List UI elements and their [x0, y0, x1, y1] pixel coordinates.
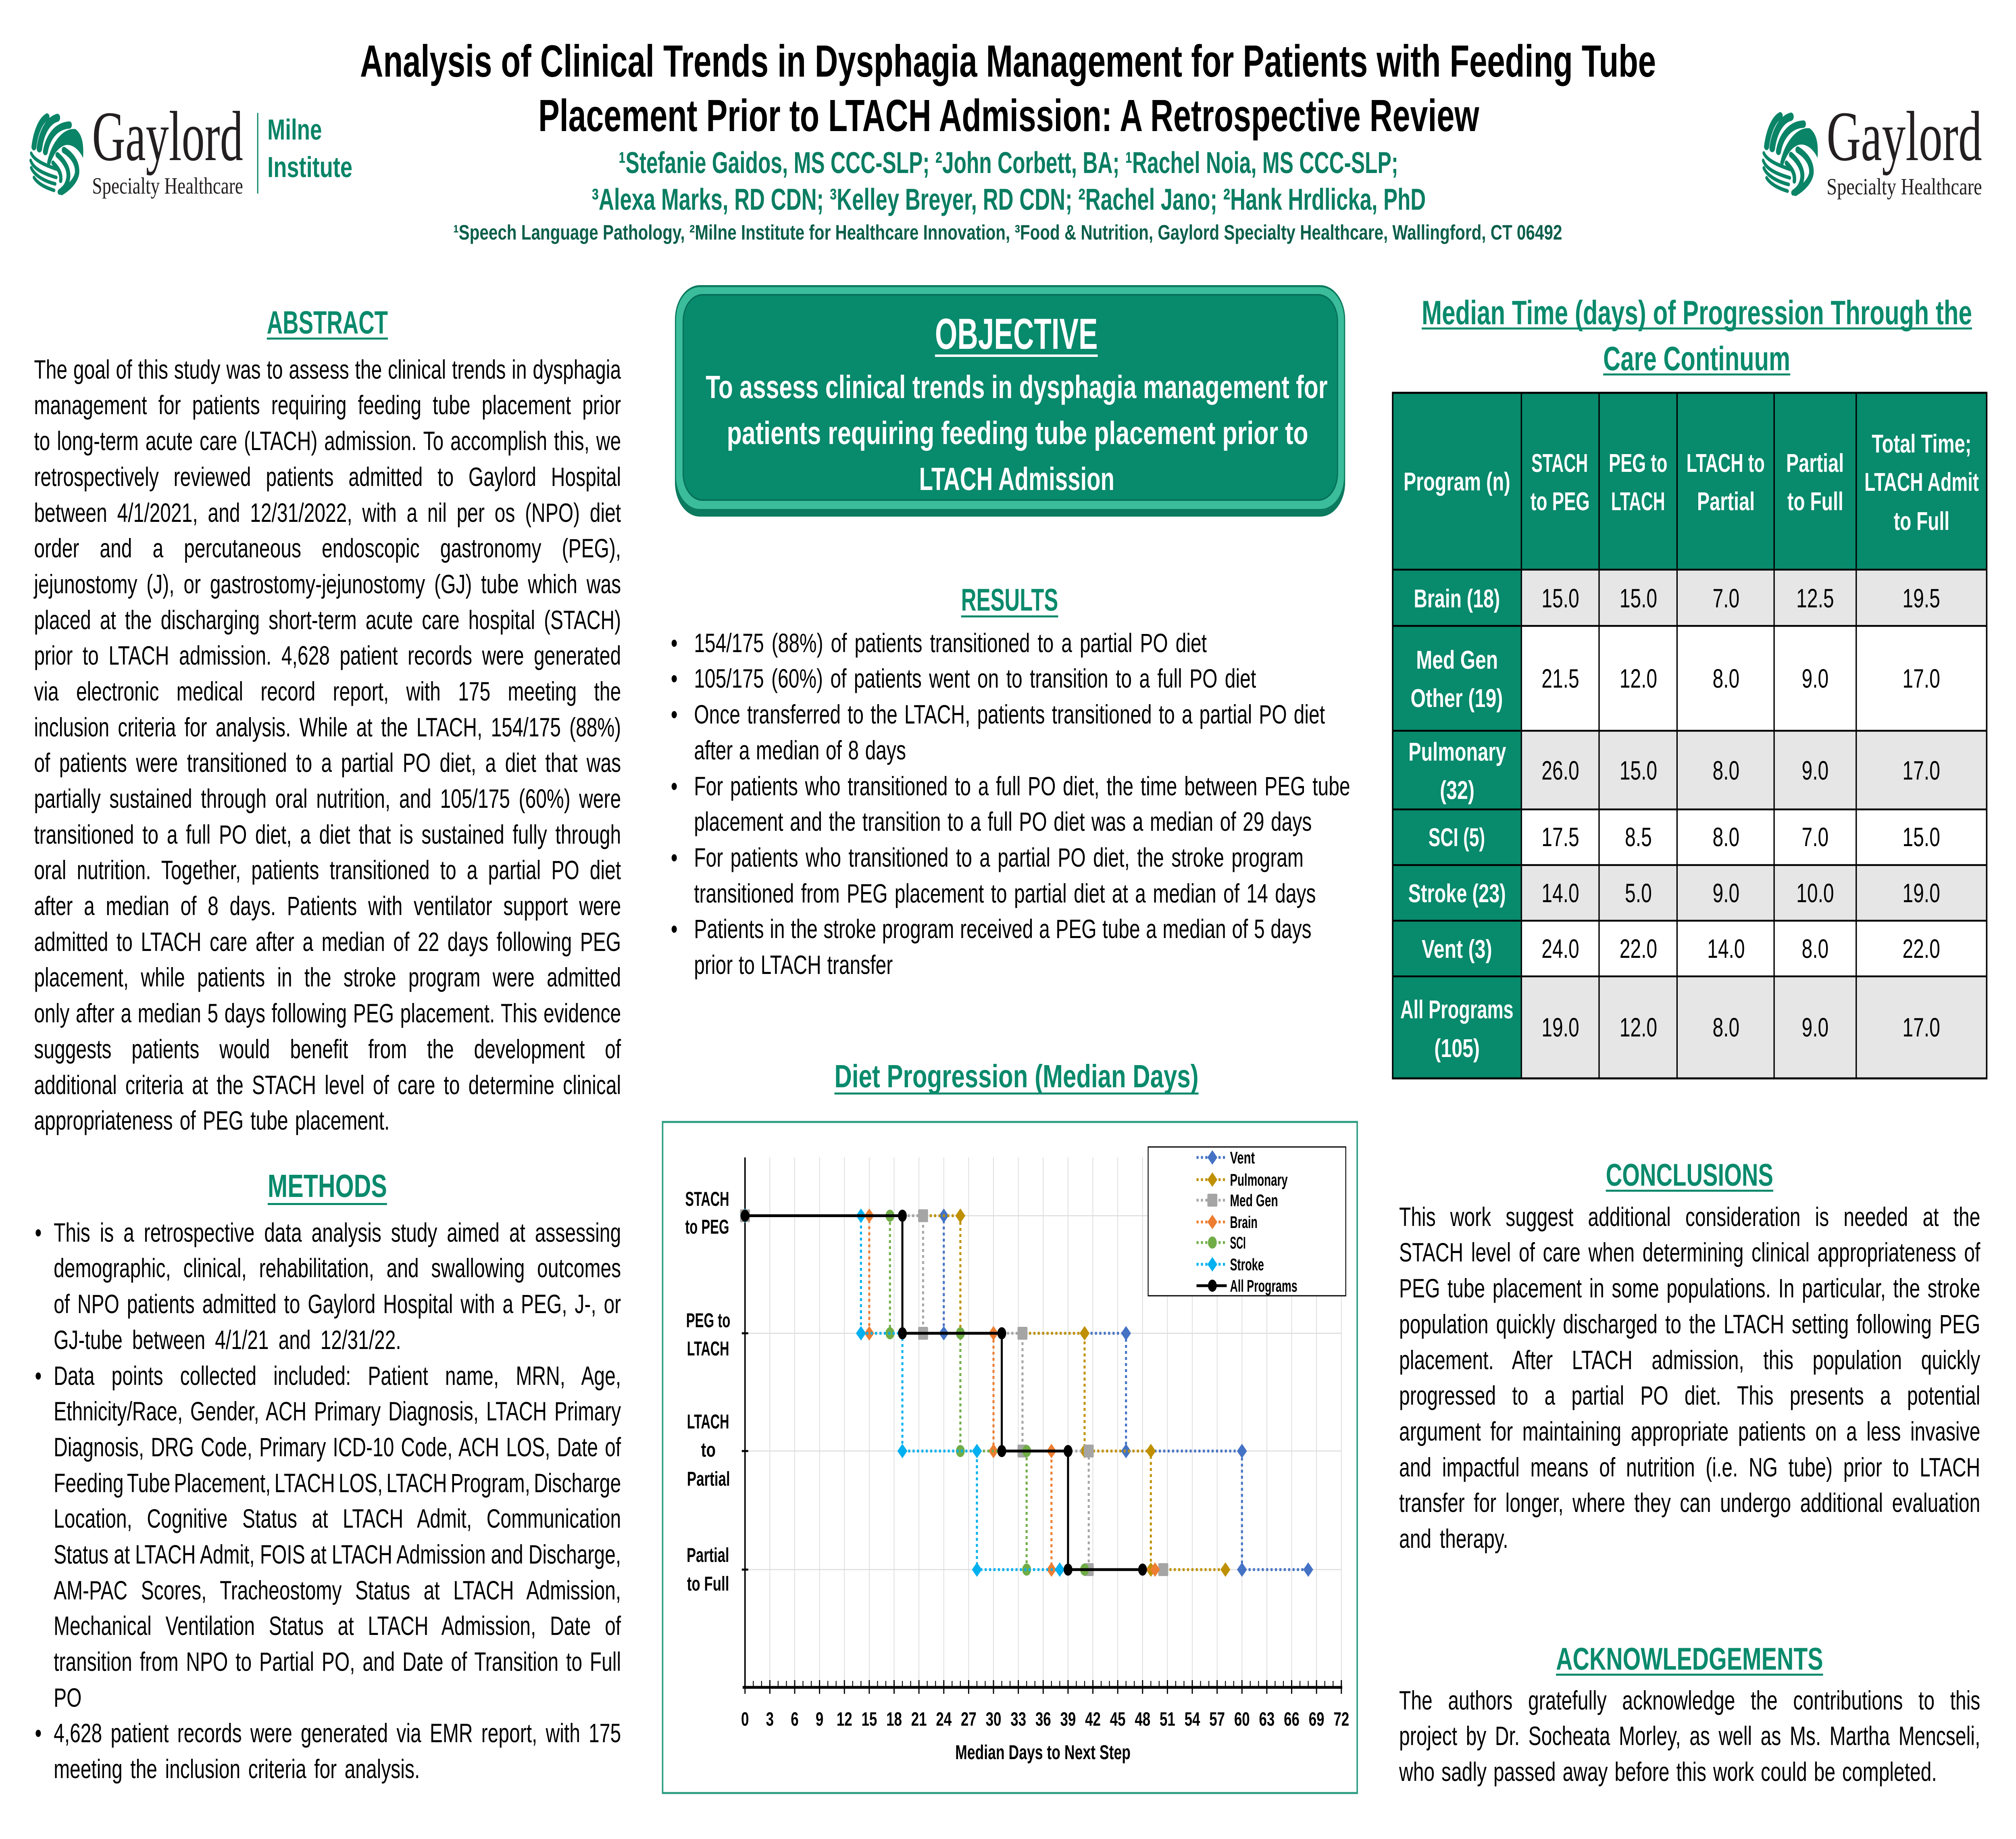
text block: abstract: appropriateness of PEG tube placement. [34, 1105, 389, 1135]
text: • [671, 699, 678, 729]
table header: STACH [1531, 448, 1588, 477]
x axis labels: 54 [1185, 1709, 1200, 1730]
legend: Pulmonary [1230, 1170, 1288, 1189]
table values: 14.0 [1707, 934, 1745, 963]
table values: 8.5 [1625, 822, 1652, 852]
table values: 15.0 [1541, 583, 1579, 613]
affiliations: ¹Speech Language Pathology, ²Milne Institute for Healthcare Innovation, ³Food & Nutrition, Gaylord Specialty Healthcare, Wallingford, CT 06492 [453, 221, 1562, 244]
x axis labels: 72 [1333, 1709, 1349, 1730]
text block: abstract: order and a percutaneous endoscopic gastronomy (PEG), [34, 533, 621, 563]
text: • [671, 663, 678, 693]
text block: results: after a median of 8 days [694, 735, 906, 765]
text block: conclusions: PEG tube placement in some populations. In particular, the stroke [1399, 1273, 1980, 1303]
series: pulmonary [745, 1216, 1225, 1570]
text block: methods: Location, Cognitive Status at LTACH Admit, Communication [54, 1503, 621, 1533]
table values: 7.0 [1802, 822, 1829, 852]
text block: results: 105/175 (60%) of patients went on to transition to a full PO diet [694, 663, 1256, 693]
table values: 22.0 [1902, 934, 1940, 963]
x axis labels: 66 [1284, 1709, 1300, 1730]
authors: ³Alexa Marks, RD CDN; ³Kelley Breyer, RD CDN; ²Rachel Jano; ²Hank Hrdlicka, PhD [591, 182, 1426, 216]
authors [591, 146, 1426, 216]
legend: Stroke [1230, 1255, 1264, 1274]
table header: Partial [1786, 448, 1844, 477]
table values: 17.0 [1902, 755, 1940, 785]
text: • [671, 771, 678, 801]
text block: conclusions: STACH level of care when determining clinical appropriateness of [1399, 1237, 1980, 1267]
axes [742, 1157, 1343, 1687]
text block: abstract: suggests patients would benefit from the development of [34, 1034, 621, 1064]
text block: abstract: prior to LTACH admission. 4,628 patient records were generated [34, 640, 621, 670]
table values: 22.0 [1620, 934, 1657, 963]
table header: LTACH to [1687, 448, 1765, 477]
x axis labels: 24 [936, 1709, 952, 1730]
text block: abstract: transitioned to a full PO diet, a diet that is sustained fully through [34, 819, 621, 849]
x axis labels: 63 [1259, 1709, 1275, 1730]
y axis labels: LTACH [687, 1337, 729, 1360]
table values: 9.0 [1802, 755, 1829, 785]
table row labels [1400, 584, 1514, 1063]
title [360, 36, 1656, 141]
series: all programs [745, 1216, 1143, 1570]
text block: abstract: oral nutrition. Together, patients transitioned to a partial PO diet [34, 855, 621, 885]
text block: abstract: admitted to LTACH care after a median of 22 days following PEG [34, 927, 621, 957]
table header: to Full [1894, 507, 1949, 536]
series: stroke [745, 1216, 1060, 1570]
text block: conclusions: population quickly discharged to the LTACH setting following PEG [1399, 1309, 1980, 1339]
objective statement: To assess clinical trends in dysphagia management for [706, 369, 1328, 405]
text block: conclusions: progressed to a partial PO diet. This presents a potential [1399, 1380, 1980, 1410]
text block: acknowledgements: project by Dr. Socheata Morley, as well as Ms. Martha Mencseli, [1399, 1721, 1980, 1751]
text block: abstract [34, 352, 621, 1138]
table: median time [1393, 393, 1987, 1078]
objective statement [706, 369, 1328, 497]
text block: methods: Ethnicity/Race, Gender, ACH Primary Diagnosis, LTACH Primary [54, 1396, 621, 1426]
x axis labels: 0 [741, 1709, 749, 1730]
text: • [671, 628, 678, 658]
table values: 15.0 [1902, 822, 1940, 852]
x axis labels [741, 1709, 1349, 1730]
text block: abstract: after a median of 8 days. Patients with ventilator support were [34, 891, 621, 921]
x axis labels: 69 [1309, 1709, 1325, 1730]
wordmark: Milne Institute [267, 114, 352, 183]
icon: Gaylord yarn mark right [1763, 116, 1818, 193]
table row labels: (105) [1434, 1034, 1480, 1063]
x axis labels: 60 [1234, 1709, 1250, 1730]
heading: diet progression: Diet Progression (Median Days) [835, 1058, 1199, 1094]
table row labels: All Programs [1400, 995, 1514, 1024]
legend: Vent [1230, 1148, 1255, 1167]
legend: Brain [1230, 1213, 1258, 1232]
text block: methods: Status at LTACH Admit, FOIS at LTACH Admission and Discharge, [54, 1539, 621, 1569]
heading: methods: METHODS [268, 1168, 387, 1204]
table values: 15.0 [1620, 755, 1657, 785]
y axis labels: PEG to [686, 1309, 730, 1332]
heading: acknowledgements: ACKNOWLEDGEMENTS [1556, 1641, 1823, 1676]
table row labels: (32) [1440, 776, 1475, 805]
wordmark: Specialty Healthcare right: Specialty Healthcare [1826, 173, 1982, 200]
text block: methods: Mechanical Ventilation Status at LTACH Admission, Date of [54, 1611, 621, 1641]
table values: 12.0 [1620, 1012, 1657, 1042]
table values: 12.5 [1796, 583, 1834, 613]
text block: abstract: only after a median 5 days following PEG placement. This evidence [34, 998, 621, 1028]
text block: abstract: of patients were transitioned to a partial PO diet, a diet that was [34, 748, 621, 778]
table values [1541, 583, 1940, 1042]
text block: conclusions: placement. After LTACH admission, this population quickly [1399, 1345, 1980, 1375]
logo: Gaylord Milne Institute [31, 97, 352, 199]
text block: conclusions [1399, 1199, 1980, 1557]
wordmark: Gaylord: Gaylord [92, 97, 243, 176]
text block: results: prior to LTACH transfer [694, 950, 893, 980]
text block: results: placement and the transition to a full PO diet was a median of 29 days [694, 807, 1312, 836]
table values: 17.0 [1902, 1012, 1940, 1042]
x axis labels: 42 [1085, 1709, 1101, 1730]
table values: 10.0 [1796, 878, 1834, 908]
table header: PEG to [1609, 448, 1667, 477]
x axis labels: 9 [816, 1709, 823, 1730]
table row labels: Pulmonary [1408, 737, 1506, 766]
objective statement: LTACH Admission [919, 461, 1114, 497]
text block: abstract: The goal of this study was to assess the clinical trends in dysphagia [34, 354, 621, 384]
text block: results: Once transferred to the LTACH, patients transitioned to a partial PO diet [694, 699, 1325, 729]
table values: 8.0 [1712, 1012, 1739, 1042]
table values: 17.0 [1902, 663, 1940, 693]
text block: abstract: between 4/1/2021, and 12/31/2022, with a nil per os (NPO) diet [34, 498, 621, 528]
table header [1404, 429, 1979, 536]
y axis labels: Partial [687, 1544, 729, 1566]
heading: results: RESULTS [961, 582, 1058, 617]
y axis labels: to [701, 1439, 716, 1461]
y axis labels [685, 1188, 730, 1595]
series: med gen [745, 1216, 1163, 1570]
icon: Gaylord yarn mark [31, 117, 83, 192]
text block: abstract: partially sustained through oral nutrition, and 105/175 (60%) were [34, 784, 621, 813]
text block: results: For patients who transitioned to a full PO diet, the time between PEG tube [694, 771, 1350, 801]
text block: conclusions: transfer for longer, where they can undergo additional evaluation [1399, 1488, 1980, 1518]
table row labels: Vent (3) [1422, 934, 1492, 963]
table values: 19.0 [1902, 878, 1940, 908]
legend: All Programs [1230, 1276, 1297, 1295]
text block: results [694, 625, 1351, 983]
x axis labels: 15 [861, 1709, 877, 1730]
text: • [671, 914, 678, 944]
wordmark: Milne Institute: Milne [267, 114, 322, 146]
table values: 15.0 [1620, 583, 1657, 613]
table header: Partial [1697, 487, 1755, 516]
text block: methods: demographic, clinical, rehabilitation, and swallowing outcomes [54, 1253, 621, 1283]
heading: abstract: ABSTRACT [267, 304, 388, 340]
wordmark: Specialty Healthcare: Specialty Healthcare [92, 173, 243, 199]
x axis labels: 36 [1035, 1709, 1051, 1730]
x axis labels: 57 [1209, 1709, 1225, 1730]
text block: results: For patients who transitioned to a partial PO diet, the stroke program [694, 842, 1304, 872]
x axis labels: 6 [791, 1709, 799, 1730]
heading: objective: OBJECTIVE [935, 309, 1098, 358]
text block: abstract: retrospectively reviewed patients admitted to Gaylord Hospital [34, 462, 621, 492]
table values: 12.0 [1620, 663, 1657, 693]
text block: conclusions: This work suggest additional consideration is needed at the [1399, 1202, 1980, 1232]
chart: diet progression [662, 1122, 1357, 1793]
legend: Med Gen [1230, 1191, 1278, 1210]
x axis labels: 30 [986, 1709, 1001, 1730]
text block: methods: of NPO patients admitted to Gaylord Hospital with a PEG, J-, or [54, 1289, 621, 1319]
text block: methods: This is a retrospective data analysis study aimed at assessing [54, 1218, 621, 1247]
text block: abstract: additional criteria at the STACH level of care to determine clinical [34, 1070, 621, 1100]
table header: LTACH [1611, 487, 1665, 516]
text block: abstract: to long-term acute care (LTACH) admission. To accomplish this, we [34, 426, 621, 456]
text block: methods: meeting the inclusion criteria for analysis. [54, 1754, 420, 1784]
y axis labels: to Full [687, 1572, 729, 1595]
table row labels: Other (19) [1410, 684, 1503, 713]
table values: 9.0 [1802, 663, 1829, 693]
logo: Gaylord right [1763, 97, 1982, 200]
x axis labels: 33 [1010, 1709, 1026, 1730]
text block: methods: 4,628 patient records were generated via EMR report, with 175 [54, 1718, 621, 1748]
table row labels: Brain (18) [1414, 584, 1500, 613]
x axis labels: 18 [886, 1709, 902, 1730]
text block: results: transitioned from PEG placement to partial diet at a median of 14 days [694, 878, 1316, 908]
x axis labels: 3 [766, 1709, 774, 1730]
text block: methods: PO [54, 1683, 81, 1712]
text block: methods: AM-PAC Scores, Tracheostomy Status at LTACH Admission, [54, 1575, 621, 1605]
text block: conclusions: and impactful means of nutrition (i.e. NG tube) prior to LTACH [1399, 1452, 1980, 1482]
text block: acknowledgements [1399, 1683, 1980, 1790]
series: sci [745, 1216, 1085, 1570]
table values: 19.5 [1902, 583, 1940, 613]
wordmark: Milne Institute: Institute [267, 151, 352, 183]
series: brain [745, 1216, 1155, 1570]
y axis labels: STACH [685, 1188, 729, 1210]
heading: conclusions: CONCLUSIONS [1606, 1157, 1773, 1193]
text block: abstract: placed at the discharging short-term acute care hospital (STACH) [34, 605, 621, 635]
text block: methods: Data points collected included: Patient name, MRN, Age, [54, 1361, 621, 1391]
text block: acknowledgements: who sadly passed away before this work could be completed. [1399, 1757, 1937, 1787]
heading: median time table: Care Continuum [1603, 340, 1790, 377]
x axis labels: 45 [1110, 1709, 1126, 1730]
table values: 19.0 [1541, 1012, 1579, 1042]
authors: ¹Stefanie Gaidos, MS CCC-SLP; ²John Corbett, BA; ¹Rachel Noia, MS CCC-SLP; [619, 146, 1398, 179]
heading: median time table [1422, 294, 1972, 377]
table values: 9.0 [1802, 1012, 1829, 1042]
text block: acknowledgements: The authors gratefully acknowledge the contributions to this [1399, 1685, 1980, 1715]
text block: conclusions: and therapy. [1399, 1524, 1508, 1553]
text block: results: Patients in the stroke program received a PEG tube a median of 5 days [694, 914, 1312, 944]
title: Analysis of Clinical Trends in Dysphagia Management for Patients with Feeding Tube [360, 36, 1656, 86]
text: • [671, 842, 678, 872]
table row labels: SCI (5) [1429, 823, 1485, 852]
objective statement: patients requiring feeding tube placement prior to [727, 415, 1308, 451]
table header: Program (n) [1404, 467, 1510, 496]
table header: LTACH Admit [1864, 467, 1979, 496]
table values: 7.0 [1712, 583, 1739, 613]
y axis labels: LTACH [687, 1410, 729, 1433]
text: • [35, 1218, 42, 1247]
table values: 17.5 [1541, 822, 1579, 852]
x axis labels: 48 [1135, 1709, 1150, 1730]
table header: to PEG [1531, 487, 1590, 516]
text block: abstract: jejunostomy (J), or gastrostomy-jejunostomy (GJ) tube which was [34, 569, 621, 599]
y axis labels: Partial [687, 1468, 730, 1490]
text block: abstract: inclusion criteria for analysis. While at the LTACH, 154/175 (88%) [34, 712, 621, 742]
text block: abstract: management for patients requiring feeding tube placement prior [34, 390, 621, 420]
text: • [35, 1361, 42, 1391]
x axis labels: 27 [961, 1709, 977, 1730]
title: Placement Prior to LTACH Admission: A Retrospective Review [538, 90, 1479, 141]
x axis labels: 21 [911, 1709, 927, 1730]
table row labels: Med Gen [1416, 645, 1498, 674]
table values: 14.0 [1541, 878, 1579, 908]
table header: Total Time; [1872, 429, 1971, 458]
y axis labels: to PEG [685, 1216, 729, 1238]
text block: abstract: placement, while patients in the stroke program were admitted [34, 962, 621, 992]
table row labels: Stroke (23) [1408, 879, 1506, 908]
table values: 24.0 [1541, 934, 1579, 963]
text: • [35, 1718, 42, 1748]
text block: results: 154/175 (88%) of patients transitioned to a partial PO diet [694, 628, 1207, 658]
table header: to Full [1787, 487, 1843, 516]
series: vent [745, 1216, 1308, 1570]
table values: 8.0 [1802, 934, 1829, 963]
text block: methods: transition from NPO to Partial PO, and Date of Transition to Full [54, 1647, 621, 1676]
x axis title: Median Days to Next Step [955, 1741, 1131, 1764]
text block: abstract: via electronic medical record report, with 175 meeting the [34, 676, 621, 706]
table values: 21.5 [1541, 663, 1579, 693]
table values: 8.0 [1712, 755, 1739, 785]
text block: methods [54, 1215, 621, 1787]
table values: 8.0 [1712, 663, 1739, 693]
x axis labels: 12 [837, 1709, 852, 1730]
legend [1148, 1147, 1346, 1296]
text block: conclusions: argument for maintaining appropriate patients on a less invasive [1399, 1416, 1980, 1446]
text block: methods: GJ-tube between 4/1/21 and 12/31/22. [54, 1325, 401, 1355]
panel: objective [675, 285, 1345, 517]
x axis labels: 39 [1060, 1709, 1076, 1730]
wordmark: Gaylord right: Gaylord [1826, 97, 1982, 176]
text block: methods: Feeding Tube Placement, LTACH LOS, LTACH Program, Discharge [54, 1468, 621, 1498]
table values: 8.0 [1712, 822, 1739, 852]
text block: methods: Diagnosis, DRG Code, Primary ICD-10 Code, ACH LOS, Date of [54, 1432, 621, 1462]
legend: SCI [1230, 1233, 1246, 1252]
table values: 9.0 [1712, 878, 1739, 908]
x axis labels: 51 [1160, 1709, 1175, 1730]
table values: 5.0 [1625, 878, 1652, 908]
table values: 26.0 [1541, 755, 1579, 785]
heading: median time table: Median Time (days) of Progression Through the [1422, 294, 1972, 332]
